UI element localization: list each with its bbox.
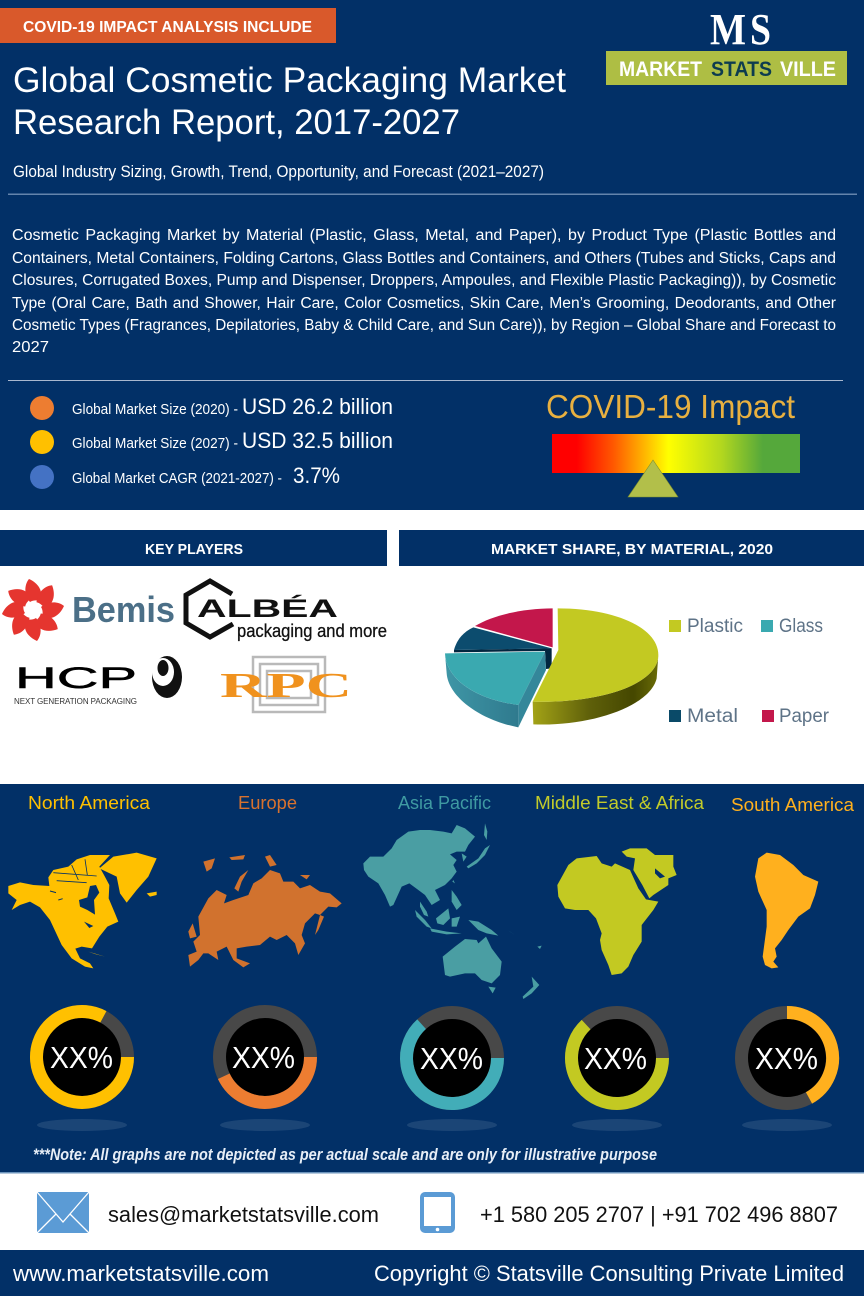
logo: hcp: HCP — [15, 662, 137, 695]
donut: south america: XX% — [755, 1041, 818, 1076]
panel: regions — [0, 784, 864, 1174]
logo: bemis: Bemis — [72, 589, 175, 630]
pie legend: Metal — [687, 706, 738, 727]
map: asia pacific — [363, 823, 542, 999]
icon: envelope — [37, 1192, 89, 1233]
stat: market cagr — [30, 463, 340, 489]
map: middle east and africa — [557, 848, 677, 975]
report description: 2027 — [12, 339, 49, 356]
label: asia pacific: Asia Pacific — [398, 793, 491, 813]
logo: rpc — [220, 657, 352, 712]
logo: bemis — [2, 579, 175, 641]
donut: europe — [220, 1012, 310, 1131]
covid-19 impact gauge: COVID-19 Impact — [546, 388, 795, 425]
pie legend: Paper — [779, 706, 830, 727]
report description: Containers, Metal Containers, Folding Cartons, Glass Bottles and Containers, and Others (Tubes and Sticks, Caps and — [12, 250, 836, 267]
contact: phone: +1 580 205 2707 | +91 702 496 8807 — [480, 1202, 838, 1227]
donut: north america: XX% — [50, 1040, 113, 1075]
label: middle east and africa: Middle East & Africa — [535, 793, 705, 813]
donut: asia pacific: XX% — [420, 1041, 483, 1076]
panel: header — [0, 0, 864, 510]
heading: key players — [0, 530, 387, 566]
donut: north america — [36, 1011, 128, 1131]
title: Research Report, 2017-2027 — [13, 103, 460, 142]
subtitle: Global Industry Sizing, Growth, Trend, Opportunity, and Forecast (2021–2027) — [13, 162, 544, 181]
title: Global Cosmetic Packaging Market — [13, 61, 566, 100]
title — [13, 61, 566, 142]
logo: albea: packaging and more — [237, 621, 387, 641]
pie legend: Glass — [779, 616, 823, 637]
pie legend: Plastic — [687, 616, 743, 637]
logo: rpc: RPC — [220, 666, 352, 705]
stat: market cagr: 3.7% — [293, 463, 340, 488]
report description: Cosmetic Types (Fragrances, Depilatories, Baby & Child Care, and Sun Care)), by Region – Global Share and Forecast to — [12, 317, 836, 334]
stat: market size 2020: USD 26.2 billion — [242, 394, 393, 419]
label: europe: Europe — [238, 793, 297, 813]
badge: covid-19 impact analysis: COVID-19 IMPACT ANALYSIS INCLUDE — [23, 19, 312, 36]
pie legend — [669, 616, 830, 727]
footer — [0, 1250, 864, 1296]
donut: middle east and africa: XX% — [584, 1041, 647, 1076]
contact: email: sales@marketstatsville.com — [108, 1202, 379, 1227]
donut: europe: XX% — [232, 1040, 295, 1075]
map: north america — [8, 853, 157, 968]
heading: key players: KEY PLAYERS — [145, 542, 243, 558]
logo: market stats ville: VILLE — [780, 58, 836, 81]
stat: market size 2027: Global Market Size (2027) - — [72, 435, 238, 452]
logo: market stats ville: MARKET — [619, 58, 702, 81]
logo: market stats ville: STATS — [711, 58, 772, 81]
logo: market stats ville: S — [750, 5, 771, 54]
label: north america: North America — [28, 793, 151, 813]
report description — [12, 227, 836, 356]
report description: Type (Oral Care, Bath and Shower, Hair Care, Color Cosmetics, Skin Care, Men’s Grooming, Deodorants, and Other — [12, 295, 836, 312]
stat: market size 2020: Global Market Size (2020) - — [72, 401, 238, 418]
logo: albea — [186, 581, 387, 641]
pie chart: market share by material — [445, 608, 658, 727]
stat: market size 2027 — [30, 428, 393, 454]
icon: tablet — [420, 1192, 455, 1233]
heading: market share: MARKET SHARE, BY MATERIAL, 2020 — [491, 542, 773, 558]
logo: hcp: NEXT GENERATION PACKAGING — [14, 697, 137, 706]
map: europe — [188, 855, 342, 967]
covid-19 impact gauge — [546, 388, 800, 497]
badge: covid-19 impact analysis — [0, 8, 336, 43]
map: south america — [755, 853, 818, 968]
report description: Cosmetic Packaging Market by Material (Plastic, Glass, Metal, and Paper), by Product Type (Plastic Bottles and — [12, 227, 836, 244]
footer: Copyright © Statsville Consulting Private Limited — [374, 1261, 844, 1286]
donut: asia pacific — [406, 1012, 498, 1131]
stat: market size 2020 — [30, 394, 393, 420]
logo: market stats ville: M — [710, 5, 746, 54]
report description: Closures, Corrugated Boxes, Pump and Dispenser, Droppers, Ampoules, and Flexible Plastic Packaging)), by Cosmetic — [12, 272, 836, 289]
donut: south america — [742, 1012, 833, 1131]
stat: market cagr: Global Market CAGR (2021-2027) - — [72, 470, 282, 487]
label: south america: South America — [731, 795, 855, 815]
footer: www.marketstatsville.com — [12, 1261, 269, 1286]
logo: albea: ALBÉA — [197, 594, 338, 623]
heading: market share — [399, 530, 864, 566]
logo: hcp — [14, 656, 182, 706]
stat: market size 2027: USD 32.5 billion — [242, 428, 393, 453]
logo: market stats ville — [606, 5, 847, 85]
note: ***Note: All graphs are not depicted as per actual scale and are only for illustrative purpose — [33, 1145, 657, 1164]
donut: middle east and africa — [572, 1012, 662, 1131]
